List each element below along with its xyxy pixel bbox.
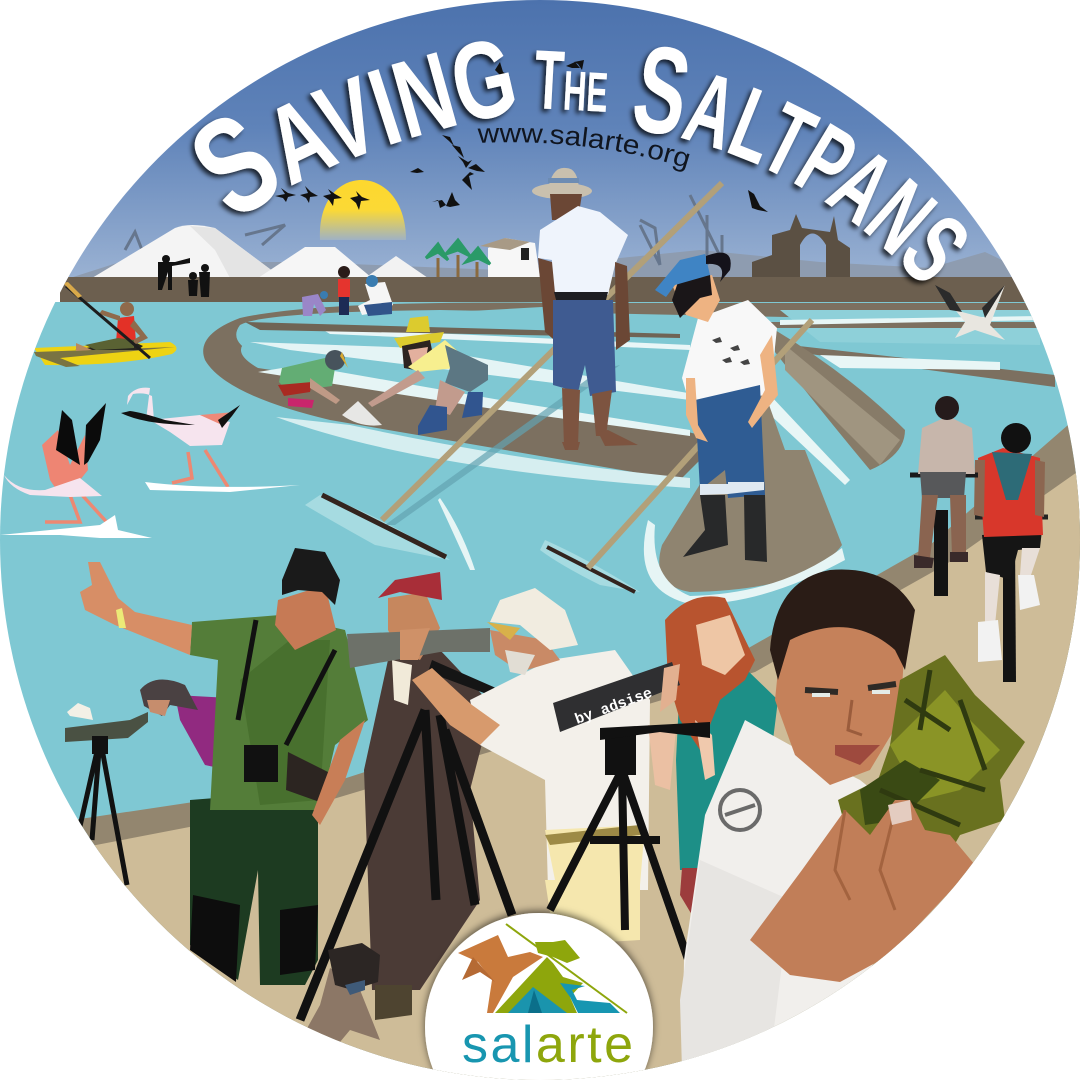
scope with brand text (553, 662, 710, 775)
logo wordmark: salarte (462, 1016, 633, 1074)
man in straw hat (532, 168, 638, 450)
small dog (305, 943, 380, 1042)
sky (64, 0, 1016, 285)
birds in the sky (275, 60, 768, 212)
right side pans (765, 310, 1055, 485)
promenade (0, 425, 1080, 1080)
salt sack (342, 401, 382, 426)
sun (320, 180, 406, 240)
baroque arch ruin (752, 214, 850, 278)
water (0, 302, 1080, 1080)
kayaker (34, 282, 177, 367)
tripod right (550, 770, 690, 965)
title word: saltpans: SALTPANS (628, 46, 967, 286)
old man with white hat (412, 588, 650, 945)
logo emblem (458, 924, 627, 1013)
title (188, 41, 967, 286)
small salt workers on far dyke (302, 266, 393, 316)
distant birdwatchers silhouettes (158, 255, 210, 297)
right rake and pole (540, 320, 812, 592)
salt mountains (92, 225, 428, 278)
pan strips (241, 306, 700, 488)
scope with brand text: by adsise (573, 685, 655, 729)
flying seabird (935, 285, 1005, 340)
title word: the: THE (530, 50, 607, 118)
logo disc (425, 913, 653, 1080)
chef in white (680, 570, 1025, 1070)
small sandpiper (67, 703, 93, 720)
guide in green (80, 548, 368, 985)
salt worker woman with blue cap (655, 253, 778, 562)
woman in yellow hat (368, 316, 488, 435)
salt pan dykes (203, 303, 1060, 480)
distant hills (70, 250, 1040, 278)
small woman at spotting scope (65, 680, 230, 885)
title word: saving: SAVING (188, 41, 515, 218)
tripod left (300, 710, 512, 1020)
salarte logo (425, 913, 653, 1080)
flamingo: right (121, 388, 300, 492)
child in green shirt (278, 350, 348, 408)
harbour cranes (125, 195, 722, 265)
website url: www.salarte.org (478, 126, 690, 172)
water highlight around island (644, 520, 845, 604)
palm trees and white farmhouse (426, 238, 540, 278)
right cyclist (974, 423, 1048, 682)
left cyclist (910, 396, 978, 596)
flamingo: left (0, 403, 152, 538)
man with red cap and scope (347, 572, 512, 1020)
red haired woman (648, 596, 778, 920)
brown shore band (60, 277, 1060, 303)
left rake and pole (305, 183, 722, 570)
pan island under woman (659, 385, 842, 592)
